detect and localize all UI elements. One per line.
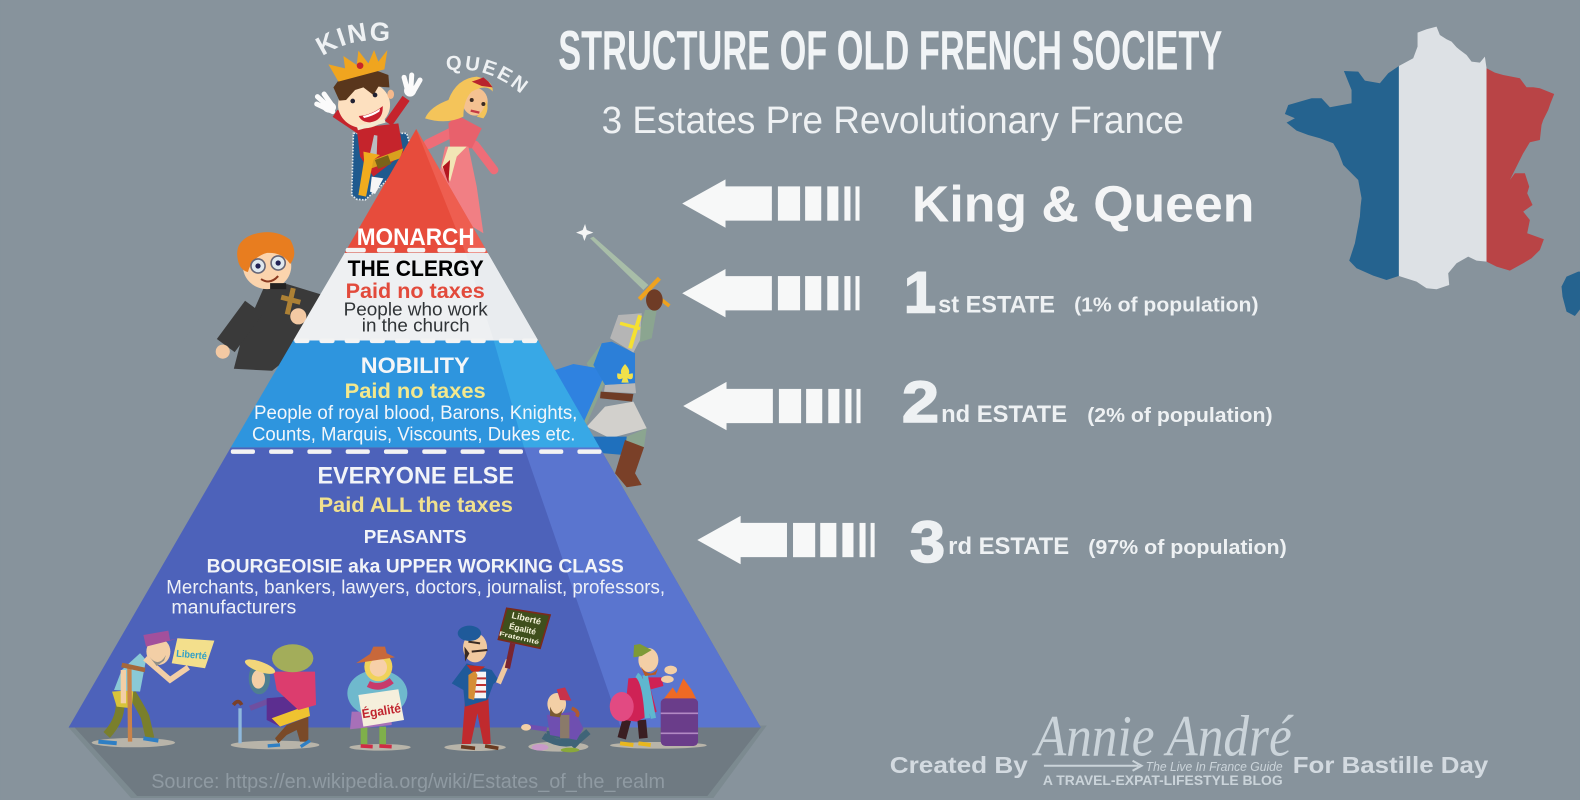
- arrow: 1st estate: [682, 269, 860, 317]
- illustration: sitting beggar: [521, 687, 588, 752]
- nobility text: Counts, Marquis, Viscounts, Dukes etc.: [252, 424, 575, 445]
- king label: KING: [315, 22, 388, 56]
- illustration: peasant warming at barrel: [610, 644, 707, 749]
- clergy text: in the church: [362, 315, 470, 335]
- credit: created by: Created By: [890, 752, 1028, 778]
- illustration: peasant with crutches: [92, 631, 214, 747]
- arrow: 2nd estate: [683, 382, 861, 430]
- nobility text: [252, 353, 577, 445]
- layer: nobility: [231, 341, 600, 447]
- label: king and queen: King & Queen: [912, 175, 1254, 233]
- arrow: king and queen: [682, 179, 860, 228]
- dashes: [231, 248, 602, 454]
- label: 3rd estate: rd ESTATE: [948, 533, 1069, 560]
- nobility text: NOBILITY: [361, 353, 470, 378]
- map of France in tricolour: [1285, 27, 1580, 316]
- arrow: 3rd estate: [697, 516, 875, 564]
- everyone else text: manufacturers: [171, 598, 296, 619]
- illustration: peasant with Egalite sign: [347, 647, 411, 751]
- illustration: sans-culotte with sign: Fraternité: [498, 630, 540, 647]
- clergy text: People who work: [344, 299, 489, 319]
- layer: everyone else: [69, 447, 761, 727]
- logo: Annie André: The Live In France Guide: [1146, 760, 1283, 774]
- source line: Source: https://en.wikipedia.org/wiki/Estates_of_the_realm: [151, 771, 665, 793]
- label: 3rd estate: [910, 510, 1287, 575]
- label: 1st estate: 1: [904, 260, 936, 325]
- everyone else text: EVERYONE ELSE: [317, 463, 514, 490]
- everyone else text: [166, 463, 665, 619]
- credit: for Bastille Day: For Bastille Day: [1293, 752, 1488, 778]
- label: 1st estate: (1% of population): [1074, 294, 1259, 316]
- illustration: sans-culotte with sign: [444, 608, 550, 751]
- label: 2nd estate: (2% of population): [1087, 405, 1273, 427]
- illustration: king: [317, 50, 420, 200]
- layer: monarch: [345, 129, 488, 253]
- illustration: sans-culotte with sign: Égalité: [508, 621, 537, 637]
- pyramid: [69, 129, 761, 727]
- clergy text: [344, 256, 489, 335]
- illustration: clergy boy: [216, 232, 320, 371]
- clergy text: THE CLERGY: [348, 256, 484, 281]
- illustration: queen: [425, 77, 494, 233]
- pyramid floor: [69, 725, 767, 798]
- label: 1st estate: [904, 260, 1259, 325]
- nobility text: Paid no taxes: [345, 380, 486, 403]
- illustration: peasant with crutches: Liberté: [176, 649, 208, 662]
- everyone else text: Merchants, bankers, lawyers, doctors, journalist, professors,: [166, 577, 665, 598]
- everyone else text: BOURGEOISIE aka UPPER WORKING CLASS: [207, 556, 624, 577]
- logo: Annie André: [1031, 704, 1294, 788]
- queen label: QUEEN: [446, 56, 528, 93]
- label: 2nd estate: 2: [902, 370, 939, 435]
- label: 3rd estate: 3: [910, 510, 945, 575]
- subtitle: 3 Estates Pre Revolutionary France: [602, 99, 1184, 142]
- monarch heading: MONARCH: [357, 224, 475, 251]
- logo: Annie André: Annie André: [1031, 704, 1294, 769]
- label: 1st estate: st ESTATE: [938, 291, 1055, 318]
- illustration: peasant with backpack: [231, 644, 319, 749]
- label: 2nd estate: [902, 370, 1273, 435]
- illustration: peasant with Egalite sign: Égalité: [361, 700, 402, 721]
- nobility text: People of royal blood, Barons, Knights,: [254, 403, 577, 424]
- everyone else text: Paid ALL the taxes: [318, 494, 513, 517]
- everyone else text: PEASANTS: [364, 527, 467, 547]
- layer: clergy: [293, 253, 538, 341]
- label: 2nd estate: nd ESTATE: [941, 401, 1067, 428]
- logo: Annie André: A TRAVEL-EXPAT-LIFESTYLE BLOG: [1043, 773, 1283, 788]
- clergy text: Paid no taxes: [346, 280, 485, 303]
- illustration: knight: [555, 224, 669, 487]
- label: 3rd estate: (97% of population): [1088, 537, 1287, 559]
- illustration: sans-culotte with sign: Liberté: [511, 610, 542, 627]
